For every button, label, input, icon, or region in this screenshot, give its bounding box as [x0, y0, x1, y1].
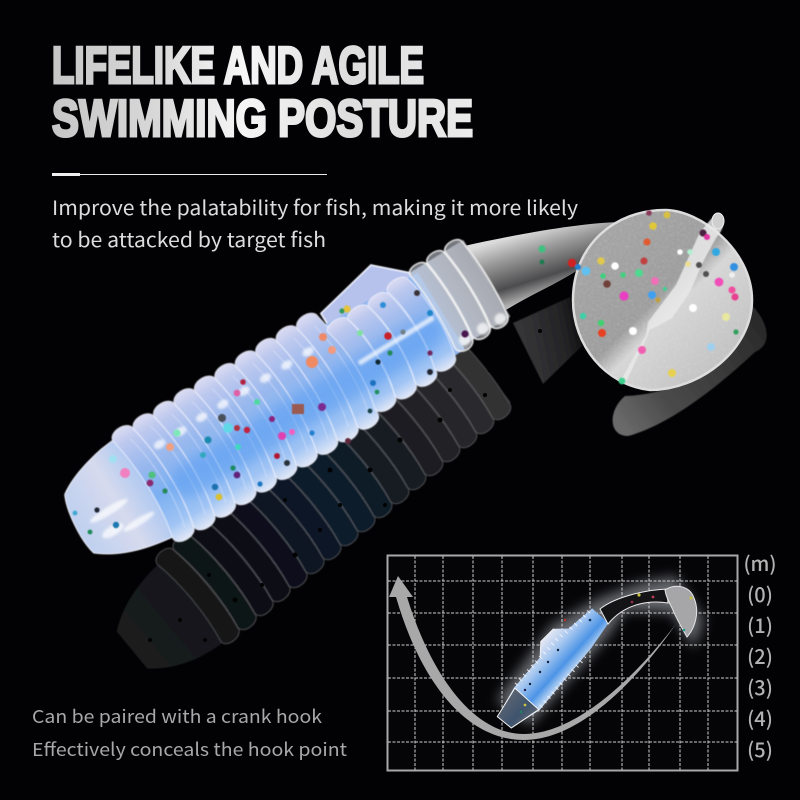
lure: blue core [166, 312, 448, 503]
reflection: body [95, 318, 517, 694]
lure: fine rib lines [130, 323, 374, 527]
chart: depth scale: (4) [747, 703, 773, 732]
title: SWIMMING POSTURE [52, 90, 473, 148]
description text [52, 192, 579, 253]
chart: grid [388, 556, 737, 770]
lure: glitter dots [73, 210, 739, 534]
mini lure: body [484, 598, 614, 735]
title: LIFELIKE AND AGILE [52, 37, 424, 95]
lure: neck [464, 222, 618, 310]
hook text: Can be paired with a crank hook [32, 703, 322, 729]
lure: white highlights [72, 250, 509, 563]
lure: fin ridge [313, 250, 431, 359]
chart: depth scale: (0) [747, 579, 773, 608]
lure: collar [407, 240, 511, 351]
hook text: Effectively conceals the hook point [32, 736, 347, 762]
depth chart [388, 548, 777, 770]
lure reflection [95, 297, 767, 694]
divider line [52, 173, 327, 176]
chart: mini lure [484, 576, 704, 735]
lure: segmented body [39, 216, 523, 587]
lure: body underlay [112, 261, 468, 538]
description text: Improve the palatability for fish, making it more likely [52, 192, 579, 221]
lure: collar rings [406, 235, 514, 355]
mini lure: dots [520, 593, 692, 713]
reflection: neck [513, 297, 582, 384]
chart: panel [388, 556, 738, 770]
lure: ribs [109, 255, 468, 546]
lure: nose [47, 434, 183, 579]
title [52, 37, 473, 148]
chart: depth scale: (2) [747, 641, 773, 670]
hook text [32, 703, 347, 762]
lure: tail disk [570, 208, 756, 394]
chart: depth scale [743, 548, 777, 763]
reflection: dark speckles [148, 329, 542, 642]
description text: to be attacked by target fish [52, 224, 326, 253]
chart: swim path arrow [389, 576, 676, 740]
main lure [63, 208, 754, 556]
mini lure: neck and tail [600, 589, 668, 624]
reflection: tail [613, 305, 767, 436]
chart: depth scale: (3) [747, 672, 773, 701]
chart: depth scale: (5) [747, 734, 773, 763]
chart: depth scale: (1) [747, 610, 773, 639]
mini lure: glow [497, 576, 704, 725]
chart: depth scale: (m) [743, 548, 777, 577]
